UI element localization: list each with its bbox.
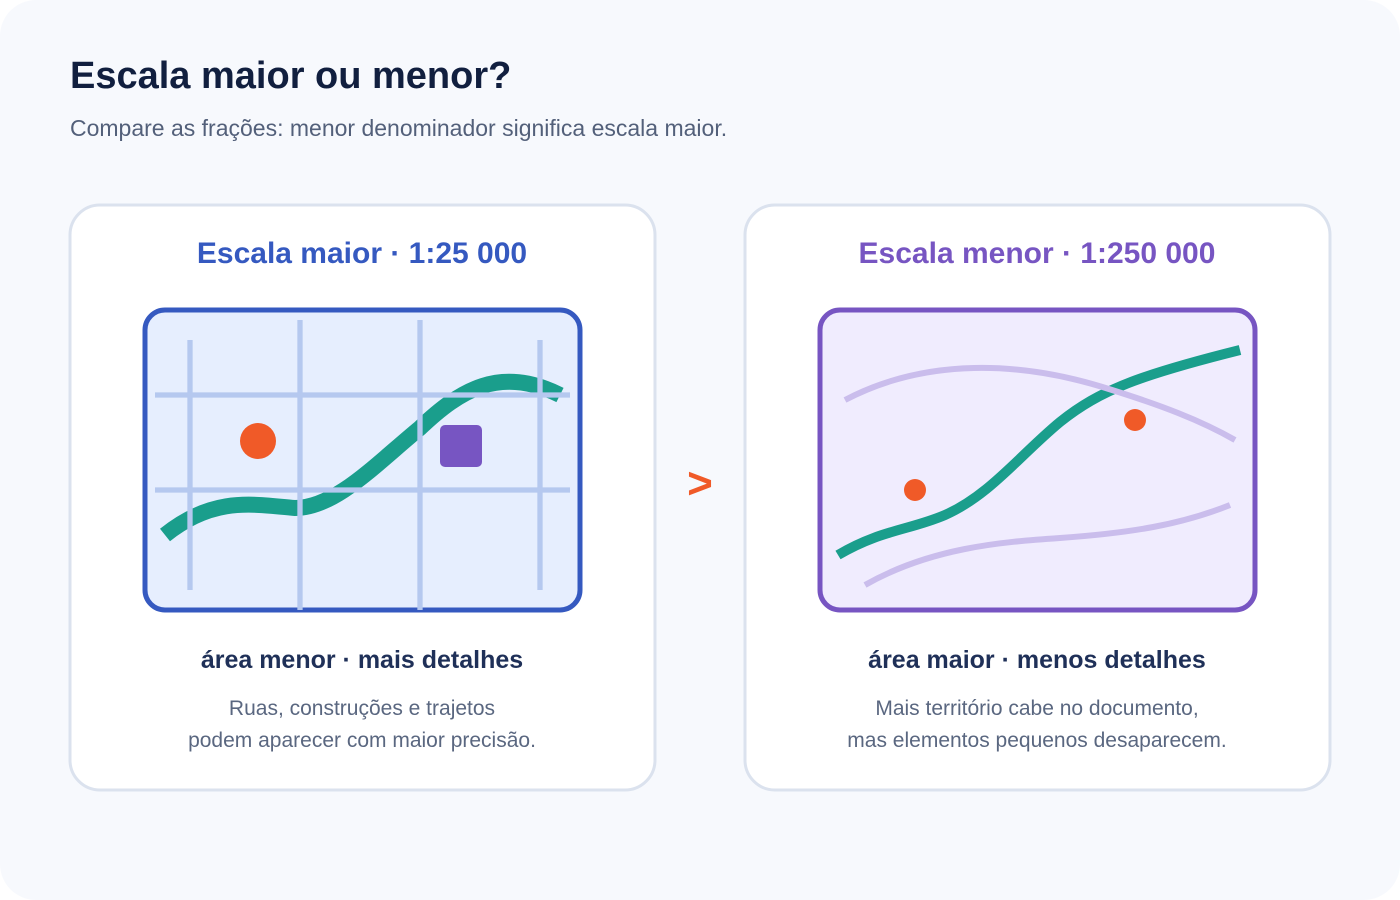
- map: small scale: [820, 310, 1255, 610]
- description: escala menor: Mais território cabe no documento,: [875, 697, 1199, 720]
- title: Escala maior ou menor?: [70, 55, 511, 97]
- description: escala menor: mas elementos pequenos desaparecem.: [847, 729, 1227, 752]
- description: escala maior: podem aparecer com maior precisão.: [188, 729, 536, 752]
- panel: escala menor: [745, 205, 1330, 790]
- map frame: [145, 310, 580, 610]
- street grid: [155, 320, 570, 610]
- label: área maior: área maior · menos detalhes: [868, 646, 1206, 674]
- river: [838, 350, 1240, 555]
- point marker: [904, 479, 926, 501]
- heading: escala maior: Escala maior · 1:25 000: [197, 237, 527, 270]
- panel: escala maior: [70, 205, 655, 790]
- description: escala maior: Ruas, construções e trajetos: [229, 697, 495, 720]
- river: [165, 382, 560, 535]
- arrow: greater-than symbol: >: [687, 459, 713, 508]
- point marker: [1124, 409, 1146, 431]
- map: large scale: [145, 310, 580, 610]
- lower road: [865, 505, 1230, 585]
- building marker: [440, 425, 482, 467]
- point marker: [240, 423, 276, 459]
- card background: [70, 205, 655, 790]
- label: área menor: área menor · mais detalhes: [201, 646, 523, 674]
- upper road: [845, 368, 1235, 440]
- heading: escala menor: Escala menor · 1:250 000: [859, 237, 1215, 270]
- subtitle: Compare as frações: menor denominador significa escala maior.: [70, 115, 727, 141]
- map frame: [820, 310, 1255, 610]
- card background: [745, 205, 1330, 790]
